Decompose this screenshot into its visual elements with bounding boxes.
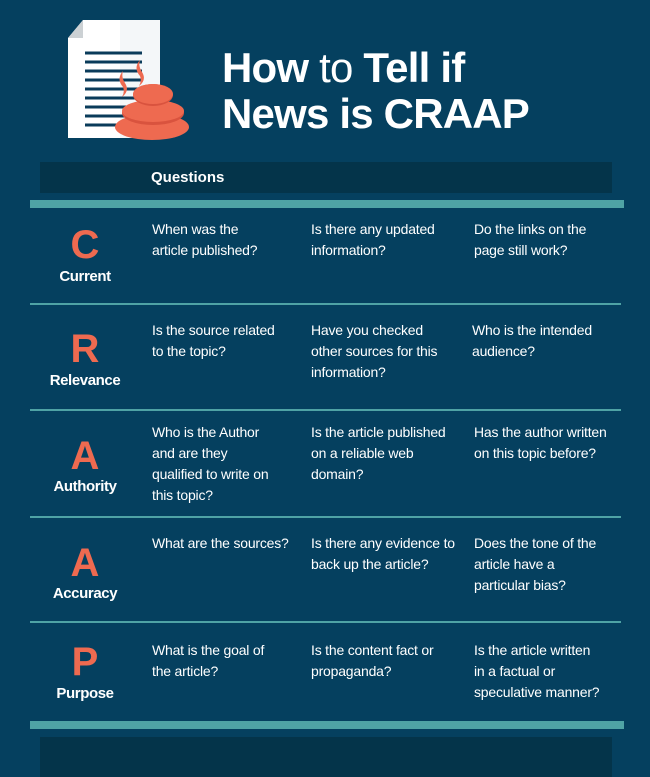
row: Accuracy: A — [71, 541, 99, 585]
row: Authority: Authority — [53, 478, 117, 495]
row: Authority: Has the author written — [474, 424, 607, 440]
row: Purpose: Is the content fact or — [311, 642, 433, 658]
icon: document with poop — [68, 20, 189, 140]
row: Current: page still work? — [474, 242, 567, 258]
title — [222, 44, 529, 137]
row: Authority: on a reliable web — [311, 445, 413, 461]
header bar — [40, 162, 612, 193]
row: Purpose: propaganda? — [311, 663, 391, 679]
row: Authority: qualified to write on — [152, 466, 268, 482]
row: Authority: Is the article published — [311, 424, 446, 440]
row: Relevance: Relevance — [50, 372, 120, 389]
row: Purpose: speculative manner? — [474, 684, 599, 700]
row: Relevance: audience? — [472, 343, 535, 359]
row: Accuracy: Accuracy — [53, 585, 117, 602]
row: Authority — [53, 424, 607, 503]
row: Purpose: P — [72, 640, 98, 684]
row: Relevance: Is the source related — [152, 322, 275, 338]
header bar: Questions — [151, 169, 224, 186]
row: Relevance — [50, 322, 592, 389]
row: Accuracy: Is there any evidence to — [311, 535, 455, 551]
row: Current — [59, 221, 586, 285]
row: Authority: A — [71, 434, 99, 478]
row: Purpose: the article? — [152, 663, 218, 679]
row: Relevance: R — [71, 327, 99, 371]
row: Relevance: information? — [311, 364, 386, 380]
row: Accuracy: Does the tone of the — [474, 535, 596, 551]
row: Authority: Who is the Author — [152, 424, 259, 440]
row: Current: Is there any updated — [311, 221, 435, 237]
row: Current: article published? — [152, 242, 257, 258]
row: Current: C — [71, 223, 99, 267]
row: Purpose — [56, 640, 599, 702]
row: Authority: and are they — [152, 445, 227, 461]
row: Authority: domain? — [311, 466, 363, 482]
row: Current: information? — [311, 242, 386, 258]
row: Purpose: in a factual or — [474, 663, 555, 679]
row: Relevance: Have you checked — [311, 322, 423, 338]
row: Accuracy: article have a — [474, 556, 554, 572]
row: Purpose: Purpose — [56, 685, 114, 702]
row: Current: When was the — [152, 221, 238, 237]
title: How to Tell if — [222, 44, 464, 91]
row: Current: Do the links on the — [474, 221, 586, 237]
row: Relevance: Who is the intended — [472, 322, 592, 338]
row: Accuracy: What are the sources? — [152, 535, 289, 551]
row: Accuracy: particular bias? — [474, 577, 566, 593]
row: Current: Current — [59, 268, 111, 285]
row: Authority: on this topic before? — [474, 445, 596, 461]
row: Purpose: What is the goal of — [152, 642, 264, 658]
row: Accuracy: back up the article? — [311, 556, 428, 572]
row: Relevance: to the topic? — [152, 343, 226, 359]
title: News is CRAAP — [222, 90, 529, 137]
row: Accuracy — [53, 535, 596, 602]
row: Authority: this topic? — [152, 487, 213, 503]
row: Purpose: Is the article written — [474, 642, 590, 658]
row: Relevance: other sources for this — [311, 343, 437, 359]
